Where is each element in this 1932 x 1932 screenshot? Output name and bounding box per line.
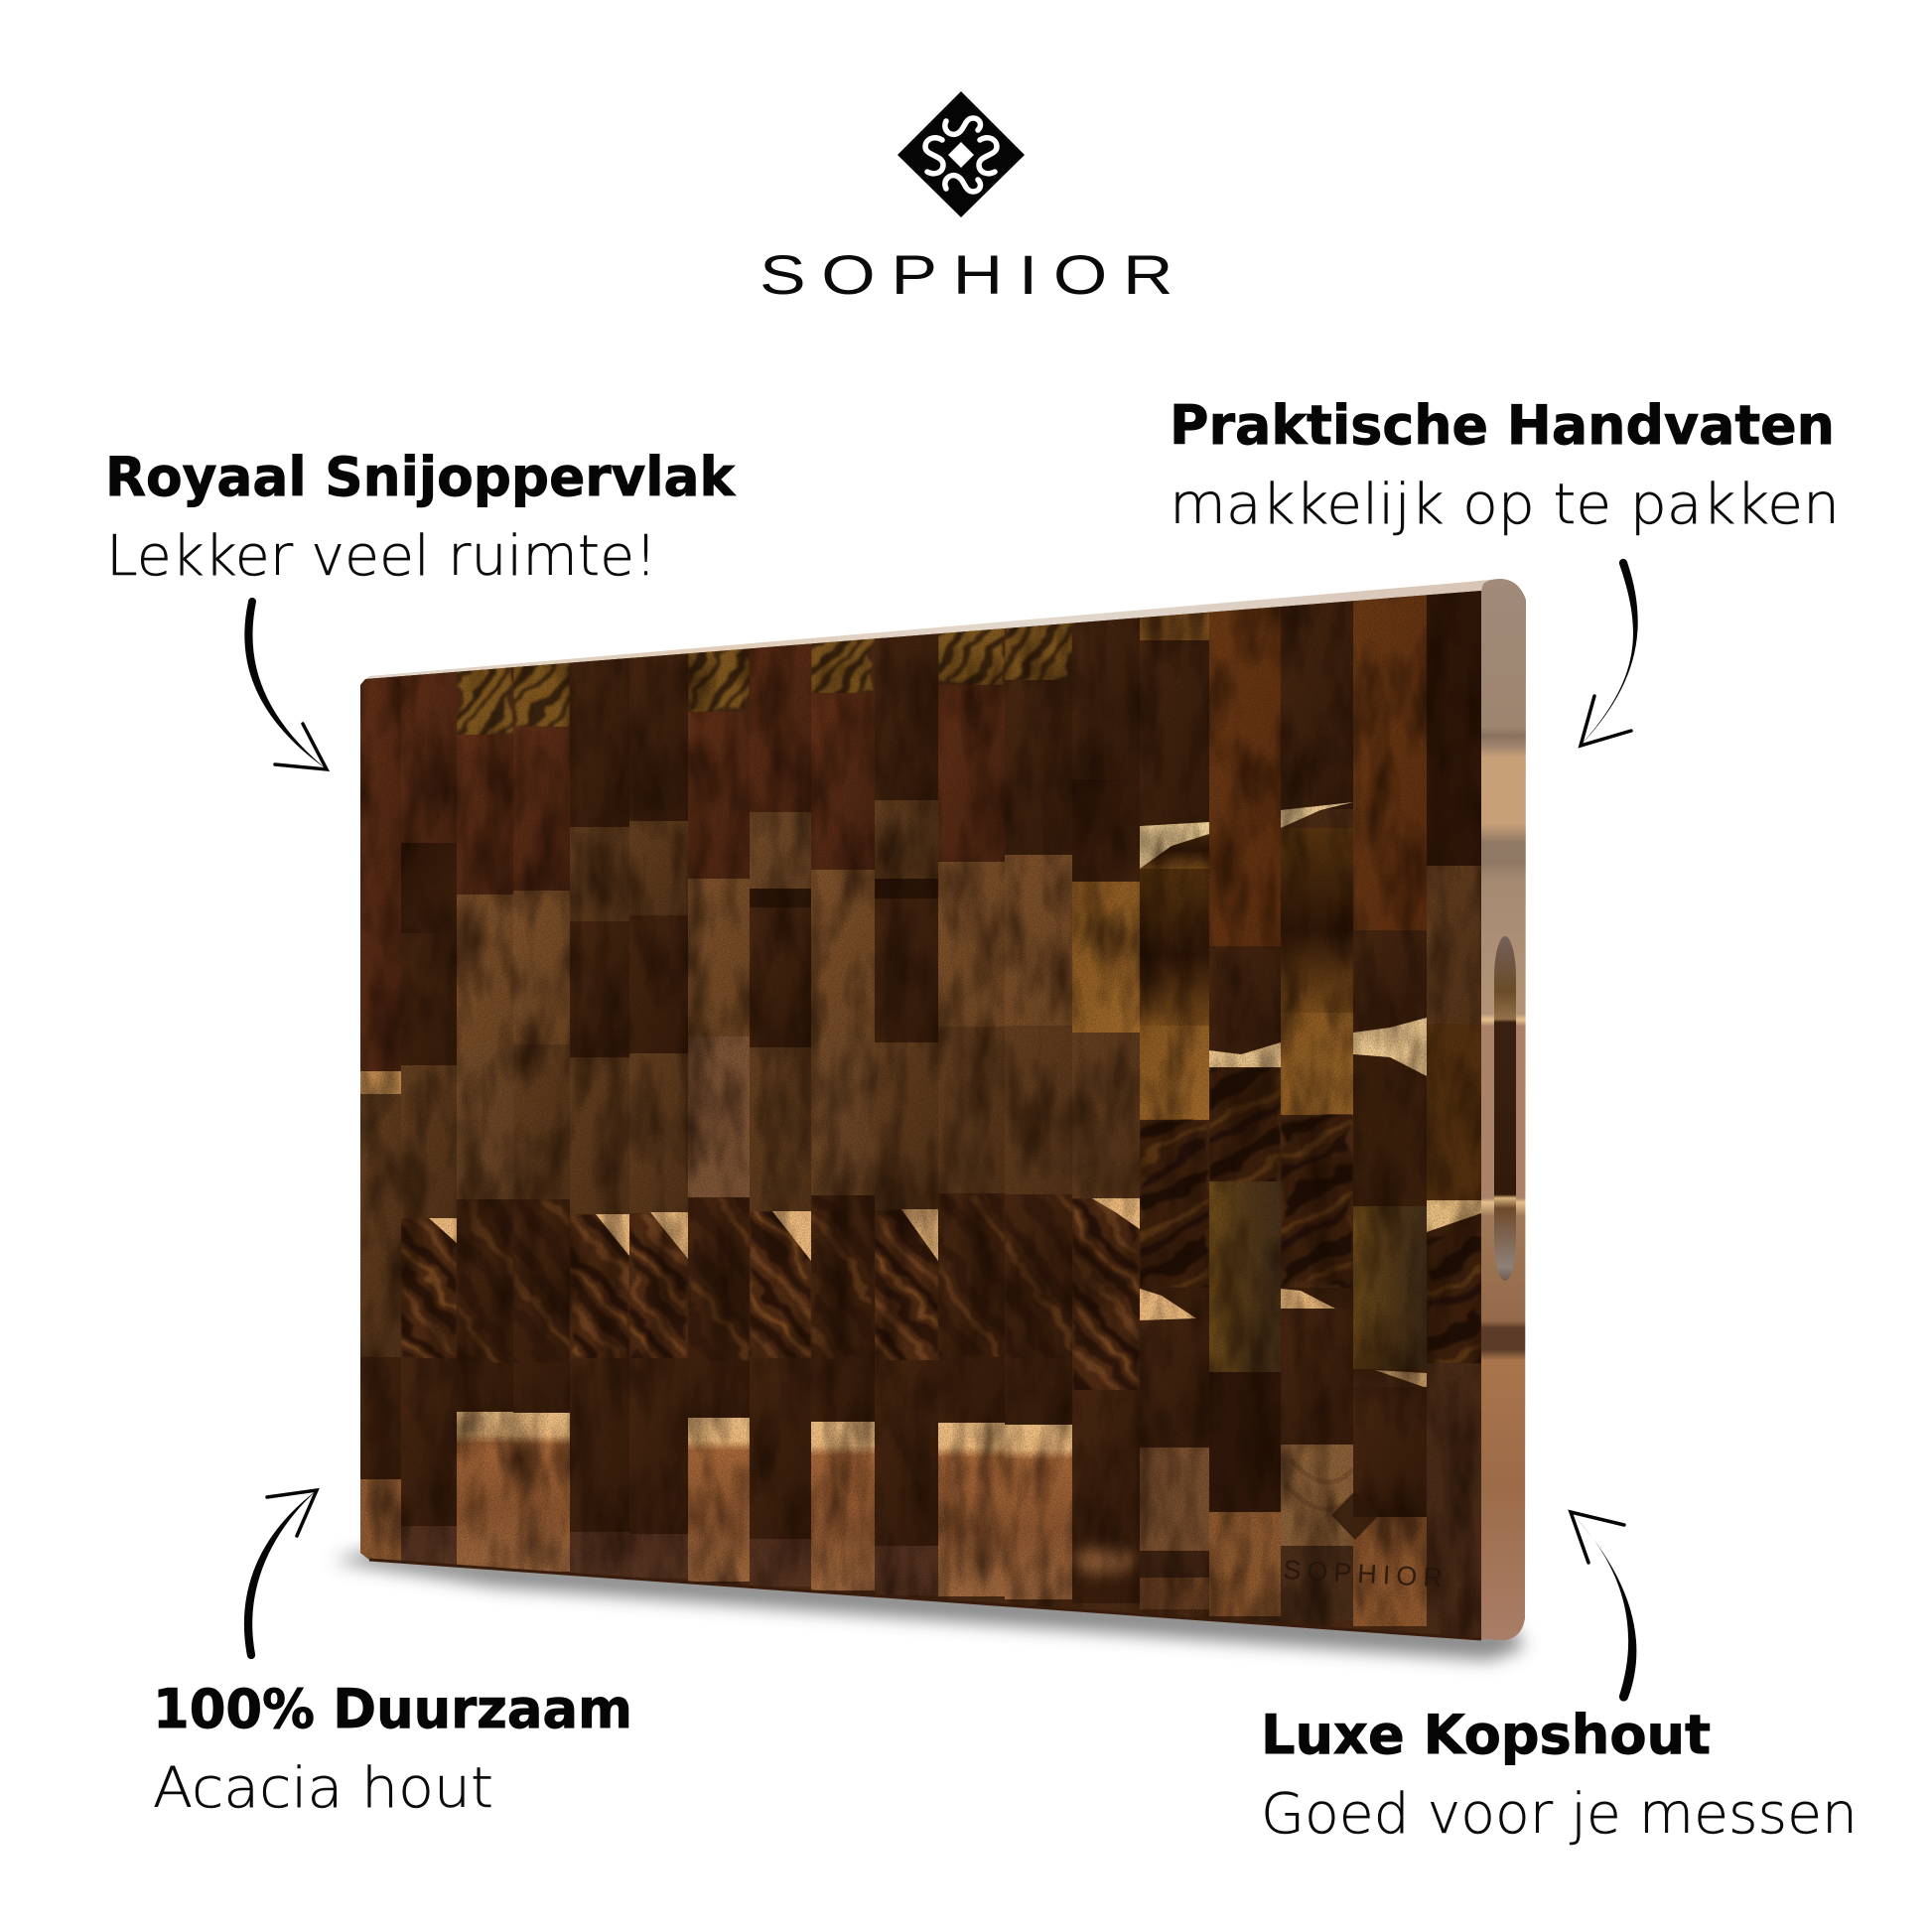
col 2 (457, 667, 513, 735)
side with handle (1481, 579, 1526, 1640)
callout: Praktische Handvaten: makkelijk op te pakken (1170, 473, 1840, 537)
col 15 (1281, 596, 1353, 809)
wood grain overlay (357, 586, 1484, 1643)
callout: Luxe Kopshout (1261, 1704, 1858, 1847)
callout: Luxe Kopshout: Luxe Kopshout (1261, 1704, 1711, 1766)
shadow (333, 1551, 1524, 1660)
col 7 (750, 635, 811, 813)
speckle overlay (357, 586, 1484, 1643)
callout: 100% Duurzaam: Acacia hout (153, 1756, 493, 1821)
col 14 (1209, 596, 1281, 947)
col 17 (1427, 586, 1481, 867)
icon: diamond emblem (897, 91, 1025, 217)
callout: Praktische Handvaten: Praktische Handvaten (1170, 394, 1835, 457)
callout: Royaal Snijoppervlak: Lekker veel ruimte! (106, 524, 657, 589)
col 6 (688, 649, 750, 712)
col 10 (938, 616, 1005, 686)
arrow: to handle (1581, 559, 1638, 746)
col 13 (1140, 606, 1209, 641)
handle (1494, 936, 1516, 1281)
col 11 (1005, 616, 1072, 681)
logo (759, 91, 1188, 306)
col 3 (513, 663, 570, 727)
bottom edge (369, 1560, 1481, 1639)
col 12 (1072, 606, 1140, 780)
col 5 (629, 645, 688, 822)
arrow: to bottom-right of board (1571, 1512, 1636, 1702)
col 4 (570, 650, 629, 828)
end-grain tiles (357, 586, 1484, 1643)
engraved logo (1283, 1491, 1449, 1593)
wordmark: SOPHIOR (759, 245, 1188, 306)
callout: Royaal Snijoppervlak (105, 446, 736, 589)
callout: 100% Duurzaam (153, 1678, 632, 1821)
arrow: to bottom-left of board (244, 1490, 317, 1659)
arrow: to top-left of board (244, 598, 327, 769)
col 16 (1353, 591, 1427, 931)
top edge (360, 579, 1499, 685)
callout: Praktische Handvaten (1170, 394, 1840, 537)
callout: 100% Duurzaam: 100% Duurzaam (153, 1678, 632, 1740)
callout: Royaal Snijoppervlak: Royaal Snijoppervlak (105, 446, 736, 508)
cutting board (333, 576, 1529, 1660)
col 8 (811, 625, 875, 694)
col 9 (875, 625, 938, 801)
col 0 (360, 675, 401, 1072)
engraved logo: SOPHIOR (1283, 1555, 1449, 1593)
callout: Luxe Kopshout: Goed voor je messen (1261, 1782, 1858, 1847)
col 1 (401, 665, 457, 844)
